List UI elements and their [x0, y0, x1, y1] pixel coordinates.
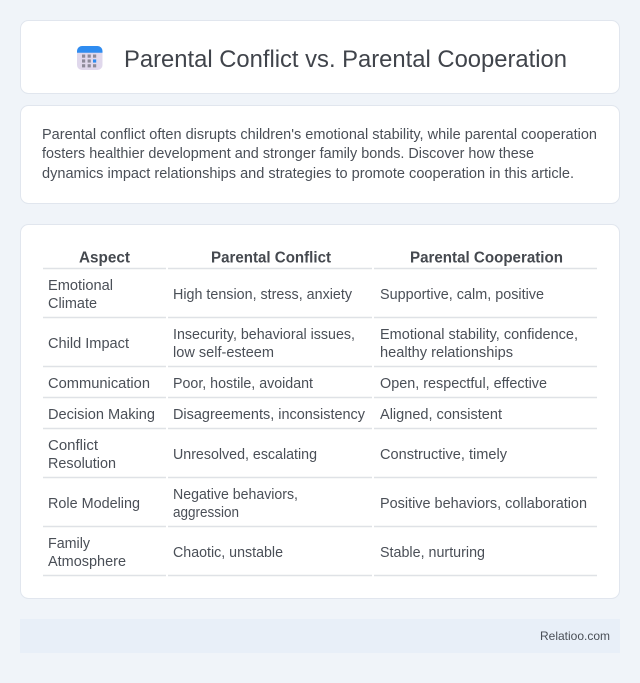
- intro text: [42, 127, 597, 182]
- intro text: fosters healthier development and stronger family bonds. Discover how these: [42, 146, 534, 162]
- row: role modeling: aggression: [173, 505, 239, 521]
- panel: title card: [20, 20, 620, 94]
- row: family atmosphere: Family: [48, 536, 91, 552]
- panel: comparison table: [20, 224, 620, 598]
- row: child impact: healthy relationships: [380, 345, 513, 361]
- row: conflict resolution: Unresolved, escalating: [173, 447, 317, 463]
- row: family atmosphere: Chaotic, unstable: [173, 545, 283, 561]
- row: emotional climate: Emotional: [48, 278, 113, 294]
- row: emotional climate: Climate: [48, 296, 97, 312]
- row: communication: [48, 376, 547, 392]
- row: conflict resolution: Conflict: [48, 438, 98, 454]
- row: family atmosphere: Atmosphere: [48, 554, 126, 570]
- intro text: Parental conflict often disrupts children's emotional stability, while parental cooperation: [42, 127, 597, 143]
- panel: introduction: [20, 106, 620, 204]
- row: decision making: [48, 407, 502, 423]
- row: decision making: Disagreements, inconsistency: [173, 407, 366, 423]
- icon: calendar: [77, 46, 102, 70]
- row: emotional climate: Supportive, calm, positive: [380, 287, 544, 303]
- row: role modeling: Positive behaviors, collaboration: [380, 496, 587, 512]
- row: conflict resolution: Resolution: [48, 456, 116, 472]
- row: role modeling: [48, 487, 587, 521]
- title: Parental Conflict vs. Parental Cooperation: [124, 46, 567, 73]
- row: emotional climate: [48, 278, 544, 312]
- row: child impact: low self-esteem: [173, 345, 274, 361]
- row: child impact: [48, 327, 578, 361]
- row: communication: Poor, hostile, avoidant: [173, 376, 313, 392]
- row: family atmosphere: [48, 536, 485, 570]
- table header: [79, 250, 563, 266]
- row: communication: Communication: [48, 376, 150, 392]
- table header: Parental Conflict: [211, 250, 332, 266]
- row: role modeling: Role Modeling: [48, 496, 140, 512]
- row: emotional climate: High tension, stress, anxiety: [173, 287, 353, 303]
- row: child impact: Emotional stability, confidence,: [380, 327, 578, 343]
- intro text: dynamics impact relationships and strategies to promote cooperation in this article.: [42, 166, 574, 182]
- row: child impact: Child Impact: [48, 336, 129, 352]
- row: role modeling: Negative behaviors,: [173, 487, 298, 503]
- table header: Aspect: [79, 250, 131, 266]
- footer bar: [20, 619, 620, 653]
- row: child impact: Insecurity, behavioral issues,: [173, 327, 355, 343]
- row: conflict resolution: [48, 438, 508, 472]
- row: decision making: Aligned, consistent: [380, 407, 502, 423]
- row: decision making: Decision Making: [48, 407, 155, 423]
- footer credit: Relatioo.com: [540, 629, 610, 643]
- row: conflict resolution: Constructive, timely: [380, 447, 508, 463]
- row: communication: Open, respectful, effective: [380, 376, 547, 392]
- row: family atmosphere: Stable, nurturing: [380, 545, 485, 561]
- table header: Parental Cooperation: [410, 250, 563, 266]
